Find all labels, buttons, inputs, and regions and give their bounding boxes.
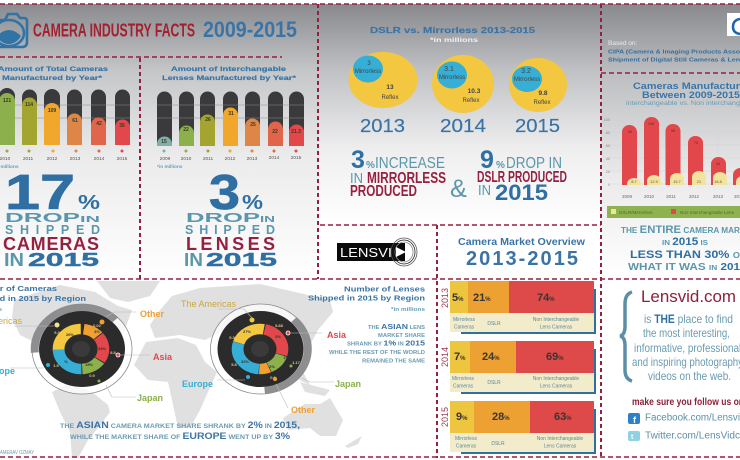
bar chart: interchangeable vs non: 34 <box>716 162 720 166</box>
heading: lenses by region: Number of Lenses <box>344 286 425 294</box>
statement: camera market share <box>60 420 300 442</box>
donut chart: cameras: 3% <box>94 329 100 334</box>
big stat: 3% drop: LENSES <box>186 234 275 254</box>
logo: Lensvid <box>337 238 417 266</box>
bar chart: interchangeable vs non: 15.7 <box>673 180 681 184</box>
statement: lens market share: WHILE THE REST OF THE WORLD <box>329 350 425 356</box>
bar chart: interchangeable vs non: 75 <box>694 141 698 145</box>
stacked bar 2015: Cameras <box>456 444 477 450</box>
bar chart: interchangeable vs non: 60 <box>606 144 610 148</box>
legend: DSLR/Mirrorless <box>619 210 653 215</box>
bar chart: lenses: *in millions <box>157 164 183 170</box>
circles 2015: Mirrorless <box>514 77 540 83</box>
big stat: 17% drop: IN <box>80 214 100 224</box>
donut chart: lenses: 3% <box>275 334 281 339</box>
legend <box>607 206 740 218</box>
bar chart: interchangeable vs non: 21 <box>697 180 701 184</box>
panel: DSLR vs mirrorless <box>348 25 567 205</box>
bar chart: interchangeable vs non: 2012 <box>689 194 700 199</box>
donut chart: cameras: % <box>64 359 68 364</box>
source text <box>608 40 740 64</box>
credit: AMERAV OZMAY <box>0 450 35 456</box>
big stat: 17% drop: IN <box>4 250 24 270</box>
circles 2015: Reflex <box>533 100 551 106</box>
stat: 9% drop: DSLR PRODUCED <box>477 169 567 186</box>
bar chart: interchangeable vs non: 2010 <box>644 194 655 199</box>
bar chart: interchangeable vs non: 96 <box>628 130 632 134</box>
stacked bar 2014: DSLR <box>487 380 501 386</box>
market statement: IN 2015 IS <box>662 236 708 248</box>
source text: Based on: <box>608 40 637 47</box>
stacked bar 2015: Non Interchangeable <box>537 436 583 442</box>
circles 2014 <box>432 55 494 113</box>
circles 2014: Mirrorless <box>439 75 465 81</box>
bar chart: interchangeable vs non: 2011 <box>666 194 676 199</box>
bar chart: lenses <box>157 92 304 170</box>
icon: camera <box>0 14 27 47</box>
stacked bar 2014: Cameras <box>453 384 474 390</box>
donut chart: cameras: 34% <box>98 346 106 351</box>
panel: camera market overview <box>440 237 596 454</box>
icon: twitter: t <box>631 434 634 441</box>
big stat: 3% drop: DROP <box>186 211 260 225</box>
logo: CIPA <box>727 13 740 36</box>
bar chart: cameras: 2012 <box>47 156 58 162</box>
big stat: 17% drop <box>3 166 100 270</box>
stacked bar 2014: 2014 <box>440 347 450 367</box>
donut chart: cameras: 0.9 <box>89 373 96 378</box>
bar chart: interchangeable vs non: 16.8 <box>714 180 722 184</box>
donut chart: cameras <box>31 304 133 394</box>
ampersand: & <box>450 175 467 203</box>
donut chart: lenses: 5.3 <box>229 335 236 340</box>
donut chart: lenses: 1% <box>283 355 289 360</box>
promo text: is THE place to find <box>644 312 733 326</box>
stacked bar 2013: 74% <box>537 292 555 304</box>
world map background <box>12 281 362 458</box>
donut chart: cameras: 1.5 <box>53 363 60 368</box>
stat: 3% increase <box>350 146 446 200</box>
logo: Lensvid: LENSVI <box>340 245 392 260</box>
circles 2013: 13 <box>386 84 394 91</box>
circles 2014: 3.1 <box>444 66 454 73</box>
twitter link: Twitter.com/LensVidc <box>645 430 740 442</box>
callouts: lenses by region: Europe <box>182 379 213 389</box>
icon: twitter <box>628 431 640 441</box>
heading: Between 2009-2015 <box>642 90 740 101</box>
market statement <box>621 224 740 273</box>
bar chart: lenses: 2009 <box>160 156 171 162</box>
bar chart: interchangeable vs non: 108 <box>648 122 654 126</box>
stat: 3% increase: MIRRORLESS <box>367 170 446 187</box>
stacked bar 2013: 5% <box>452 292 464 304</box>
stacked bar 2013: 2013 <box>440 288 450 308</box>
title: CAMERA INDUSTRY FACTS <box>33 20 195 40</box>
statement: lens market share: REMAINED THE SAME <box>362 358 426 364</box>
donut chart: cameras: 8.8 <box>110 350 117 355</box>
bar chart: cameras: 61 <box>72 118 78 124</box>
stat: 3% increase: INCREASE <box>375 155 445 172</box>
bar chart: cameras: 2011 <box>23 156 33 162</box>
stacked bar 2015: 63% <box>554 411 572 423</box>
donut chart: lenses: 1.17 <box>292 360 301 365</box>
statement: lens market share: THE ASIAN LENS <box>368 322 426 331</box>
stacked bar 2013: Non Interchangeable <box>533 317 579 323</box>
icon: facebook: f <box>633 415 637 425</box>
market statement: WHAT IT WAS IN 201 <box>628 261 740 273</box>
stacked bar 2013: Lens Cameras <box>540 324 573 330</box>
statement: camera market share: THE ASIAN CAMERA MARKET SHARE SHRANK BY 2% IN 2015, <box>60 420 300 431</box>
heading: lenses by region <box>308 286 425 313</box>
bar chart: cameras: 2013 <box>70 156 81 162</box>
bar chart: lenses: 22 <box>183 127 189 133</box>
stat: 9% drop: % <box>496 160 505 171</box>
bar chart: lenses: 25 <box>250 122 256 128</box>
icon: facebook <box>628 413 640 425</box>
bar chart: cameras: 2014 <box>94 156 105 162</box>
circles 2013: Mirrorless <box>355 69 381 75</box>
donut chart: cameras: 26% <box>66 332 74 337</box>
stacked bar 2014: 7% <box>454 351 466 363</box>
big stat: 17% drop: SHIPPED <box>5 223 100 237</box>
note: *in millions <box>430 38 479 44</box>
callouts: cameras by region: Other <box>140 309 165 319</box>
stat: 9% drop: 2015 <box>495 180 548 205</box>
stat: 9% drop <box>477 146 567 205</box>
circles 2014: 10.3 <box>468 88 481 95</box>
big stat: 3% drop: % <box>242 192 263 214</box>
panel: Lensvid promo <box>620 287 740 442</box>
stacked bar 2015: DSLR <box>491 441 505 447</box>
source text: CIPA (Camera & Imaging Products Asso <box>608 50 740 56</box>
stacked bar 2014: Non Interchangeable <box>533 376 579 382</box>
heading: cameras by region <box>0 286 86 313</box>
heading: Lenses Manufactured by Year* <box>162 75 296 82</box>
stat: 3% increase: IN <box>350 170 363 187</box>
promo text <box>632 312 740 383</box>
callouts: lenses by region: Other <box>291 405 316 415</box>
circles 2013: Reflex <box>381 95 399 101</box>
donut chart: lenses: 32% <box>241 359 249 364</box>
bar chart: interchangeable vs non: 8.7 <box>631 180 637 184</box>
stat: 9% drop: DROP IN <box>506 155 562 172</box>
bar chart: lenses: 22 <box>272 129 278 135</box>
donut chart: cameras: 0.02 <box>93 323 102 328</box>
heading: DSLR vs. Mirrorless 2013-2015 <box>370 25 535 35</box>
donut chart: lenses: 0.6 <box>270 375 277 380</box>
statement: camera market share: WHILE THE MARKET SHARE OF EUROPE WENT UP BY 3% <box>70 431 291 442</box>
donut chart: lenses: 5.88 <box>275 323 284 328</box>
bar chart: lenses: 31 <box>228 111 234 117</box>
big stat: 17% drop: 2015 <box>28 250 99 270</box>
panel: source <box>608 13 740 64</box>
heading <box>458 237 585 270</box>
heading: Amount of Interchangable <box>171 66 286 73</box>
stacked bar 2013: DSLR <box>487 321 501 327</box>
donut chart: lenses: 27% <box>243 329 251 334</box>
donut chart: lenses: 2% <box>269 364 275 369</box>
heading: lenses by region: Shipped in 2015 by Region <box>308 296 425 302</box>
title: 2009-2015 <box>203 17 297 42</box>
legend: Non Interchangeable Lens <box>680 210 735 215</box>
market statement: LESS THAN 30% O <box>630 249 740 261</box>
big stat: 3% drop: 2015 <box>206 250 277 270</box>
statement: lens market share: MARKET SHARE <box>378 333 426 339</box>
bar chart: interchangeable vs non: 20 <box>606 170 610 174</box>
stat: 3% increase: 3 <box>351 146 365 174</box>
bar chart: interchangeable vs non: 98 <box>671 129 675 133</box>
panel: cameras manufactured interchangeable vs non <box>604 81 740 273</box>
bar chart: interchangeable vs non: 80 <box>606 131 610 135</box>
big stat: 17% drop: CAMERAS <box>3 234 99 254</box>
bar chart: interchangeable vs non: 2013 <box>713 194 724 199</box>
big stat: 17% drop: % <box>78 192 100 214</box>
big stat: 3% drop: IN <box>184 250 203 270</box>
bar chart: cameras: 2015 <box>117 156 128 162</box>
donut chart: cameras: 15% <box>85 362 93 367</box>
stat: 3% increase: % <box>366 160 375 171</box>
panel: interchangeable lenses manufactured <box>157 66 304 270</box>
brace <box>620 292 632 381</box>
stacked bar 2015: Lens Cameras <box>544 444 577 450</box>
bar chart: lenses: 2011 <box>203 156 213 162</box>
stacked bar 2015 <box>440 401 596 454</box>
stacked bar 2015: 28% <box>492 411 510 423</box>
donut chart: lenses: 5.8 <box>231 362 238 367</box>
statement: lens market share: SHRANK BY 1% IN 2015 <box>347 338 425 348</box>
year labels <box>360 115 560 136</box>
callouts: lenses by region: Japan <box>335 379 361 389</box>
big stat: 3% drop <box>184 166 277 270</box>
bar chart: interchangeable vs non: 100 <box>604 118 610 122</box>
bar chart: cameras: 35 <box>119 123 125 129</box>
stacked bar 2013: 21% <box>473 292 491 304</box>
big stat: 17% drop: DROP <box>5 211 80 225</box>
year labels: 2014 <box>440 115 486 136</box>
callouts: cameras by region: Japan <box>137 393 163 403</box>
stacked bar 2015: Mirrorless <box>455 436 477 442</box>
bar chart: interchangeable vs non: 40 <box>606 157 610 161</box>
circles 2015 <box>509 58 567 112</box>
bar chart: lenses: 15 <box>161 139 167 145</box>
bar chart: interchangeable vs non <box>604 117 740 199</box>
big stat: 3% drop: IN <box>260 214 275 224</box>
year labels: 2015 <box>515 115 560 136</box>
stat: 3% increase: PRODUCED <box>350 183 417 200</box>
stacked bar 2015: 9% <box>456 411 468 423</box>
bar chart: cameras: 121 <box>3 98 11 104</box>
stacked bar 2013: Mirrorless <box>453 317 475 323</box>
heading: Amount of Total Cameras <box>0 66 108 73</box>
market statement: THE ENTIRE CAMERA MAR <box>621 224 740 236</box>
bar chart: lenses: 2015 <box>291 155 302 161</box>
heading: lenses by region: *in millions <box>391 307 425 313</box>
callouts: cameras by region: Asia <box>153 352 173 362</box>
circles 2015: 3.2 <box>521 68 531 75</box>
heading: Camera Market Overview <box>458 237 585 248</box>
callouts: lenses by region: The Americas <box>181 299 237 309</box>
bar chart: lenses: 26 <box>205 117 211 123</box>
bar chart: lenses: 2012 <box>225 156 236 162</box>
stacked bar 2013 <box>440 281 596 334</box>
bar chart: lenses: 2010 <box>181 156 192 162</box>
title <box>0 14 297 47</box>
facebook link: Facebook.com/Lensvi <box>645 412 740 424</box>
year labels: 2013 <box>360 115 405 136</box>
source text: Shipment of Digital Still Cameras & Len <box>608 58 740 64</box>
circles 2013 <box>348 52 418 108</box>
panel: total cameras manufactured <box>0 66 130 270</box>
circles 2014: Reflex <box>462 98 480 104</box>
bar chart: interchangeable vs non: 12.9 <box>650 180 658 184</box>
bar chart: lenses: 21.3 <box>291 129 301 135</box>
promo heading: Lensvid.com <box>641 287 736 306</box>
stacked bar 2015: 2015 <box>440 407 450 427</box>
stacked bar 2013: Cameras <box>454 324 475 330</box>
bar chart: cameras: 42 <box>96 121 102 127</box>
stacked bar 2014: 69% <box>546 351 564 363</box>
donut chart: lenses <box>194 290 327 408</box>
stacked bar 2014 <box>440 341 596 394</box>
circles 2013: 3 <box>367 61 371 67</box>
big stat: 3% drop: SHIPPED <box>185 223 275 237</box>
callouts: cameras by region <box>0 309 173 403</box>
callouts: lenses by region: Asia <box>327 330 347 340</box>
panel: region map <box>0 286 426 456</box>
heading <box>626 81 740 107</box>
donut chart: cameras: 5.3 <box>54 330 61 335</box>
bar chart: cameras: 109 <box>48 108 56 114</box>
big stat: 3% drop: 3 <box>209 166 240 220</box>
heading: Manufactured by Year* <box>2 75 102 82</box>
stat: 9% drop: 9 <box>480 146 494 174</box>
bar chart: cameras: 114 <box>25 102 33 108</box>
stacked bar 2014: Lens Cameras <box>540 384 573 390</box>
bar chart: interchangeable vs non: 2009 <box>622 194 633 199</box>
bar chart: lenses: 2014 <box>269 155 280 161</box>
callouts: lenses by region <box>181 299 361 415</box>
bar chart: interchangeable vs non: 0 <box>608 183 610 187</box>
heading: interchangeable vs. Non interchang <box>626 101 740 107</box>
stat: 9% drop: IN <box>478 182 491 199</box>
circles 2015: 9.8 <box>538 90 548 97</box>
big stat: 17% drop: 17 <box>5 166 75 220</box>
bar chart: lenses: 2013 <box>247 156 258 162</box>
stacked bar 2014: 24% <box>482 351 500 363</box>
bar chart: cameras <box>0 88 130 170</box>
statement: lens market share <box>329 322 426 364</box>
heading: 2013-2015 <box>466 248 578 270</box>
heading: Cameras Manufactur <box>633 81 740 92</box>
stacked bar 2014: Mirrorless <box>452 376 474 382</box>
